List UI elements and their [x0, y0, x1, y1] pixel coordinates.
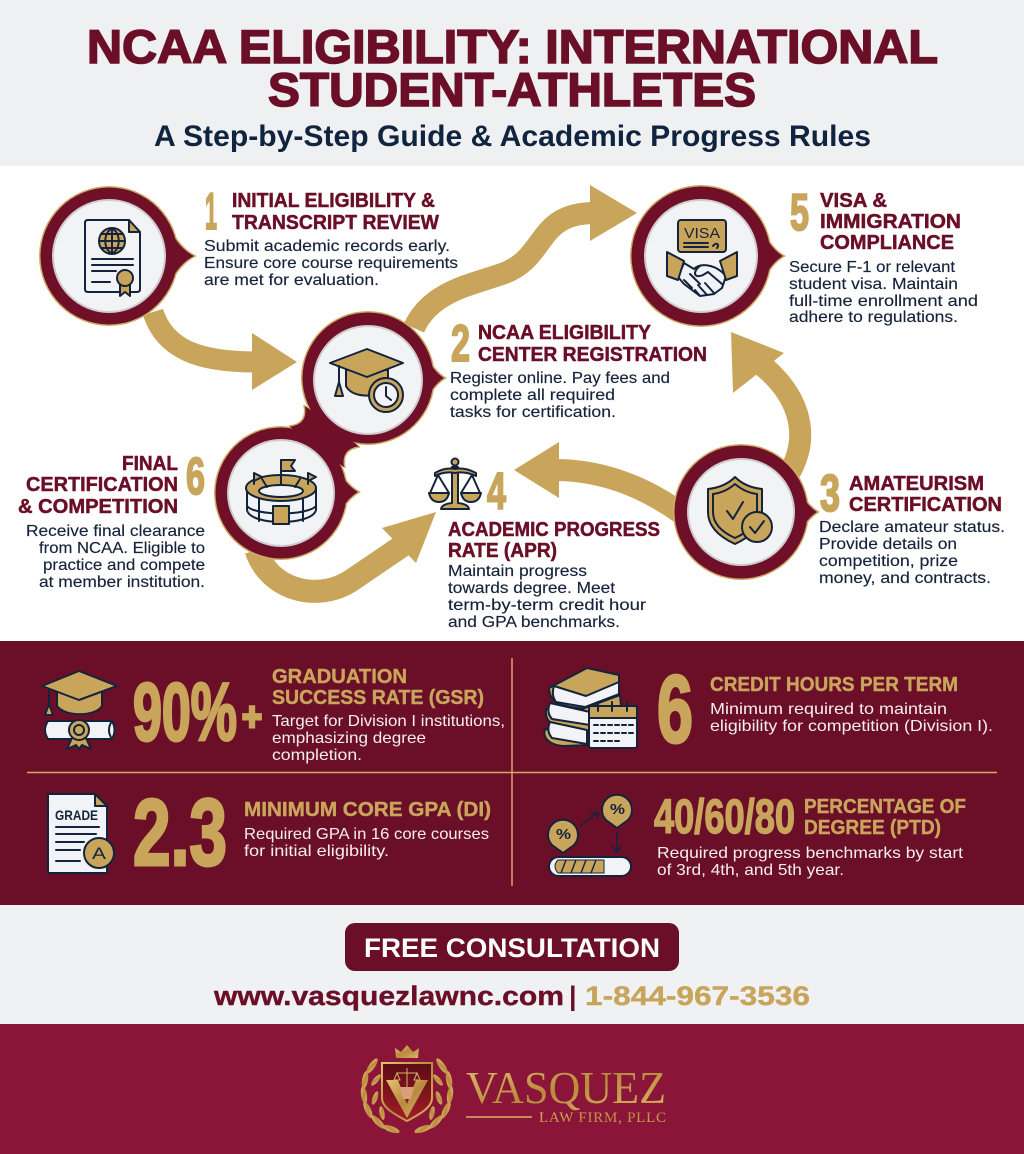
contact details: |	[569, 981, 577, 1011]
step 6 text	[18, 448, 205, 591]
badge: step 3	[673, 444, 820, 580]
step 3 body: Provide details on	[819, 536, 957, 553]
stat description: completion.	[272, 747, 362, 764]
step 4 heading	[448, 519, 660, 562]
icon: shield crest	[382, 1063, 432, 1121]
arrow: step 3 to step 4	[514, 442, 682, 514]
stat heading: SUCCESS RATE (GSR)	[272, 687, 484, 709]
stat: minimum core gpa	[48, 780, 491, 886]
step 1 heading	[232, 190, 439, 234]
stat value: 2.3	[133, 780, 227, 886]
icon: transcript document	[85, 220, 140, 296]
arrow: step 2 to step 5	[414, 185, 637, 328]
icon: stadium	[246, 460, 316, 524]
step 3 body: money, and contracts.	[819, 570, 991, 587]
stat heading	[272, 666, 484, 709]
icon: graduation cap with clock	[330, 349, 403, 412]
badge: step 1	[39, 186, 197, 326]
step 6 body	[26, 523, 205, 591]
stat: graduation success rate	[42, 666, 505, 764]
stat description	[710, 701, 993, 735]
stat heading: GRADUATION	[272, 666, 407, 688]
step 3 body: Declare amateur status.	[819, 519, 1005, 536]
stat description: Target for Division I institutions,	[272, 713, 505, 730]
step 3 body: competition, prize	[819, 553, 958, 570]
step 6 body: Receive final clearance	[26, 523, 205, 540]
step 6 heading: CERTIFICATION	[26, 474, 178, 496]
stat description: Required GPA in 16 core courses	[244, 826, 489, 843]
contact details: 1-844-967-3536	[585, 981, 810, 1011]
step 2 body: complete all required	[450, 387, 615, 404]
stat description	[657, 845, 964, 879]
badge: step 2	[301, 311, 447, 445]
stat heading: PERCENTAGE OF	[804, 796, 966, 818]
stat heading	[804, 796, 966, 839]
icon: cap and diploma	[42, 671, 117, 749]
button: free consultation: FREE CONSULTATION	[364, 933, 660, 963]
stat value: 40/60/80	[654, 791, 795, 844]
step 2 heading: CENTER REGISTRATION	[478, 344, 707, 366]
logo wordmark: LAW FIRM, PLLC	[539, 1110, 666, 1126]
step 3 heading: AMATEURISM	[849, 473, 984, 495]
step 6 body: from NCAA. Eligible to	[39, 540, 205, 557]
step 1 body: Submit academic records early.	[204, 238, 450, 255]
stat value: 6	[657, 656, 693, 763]
step 5 heading: COMPLIANCE	[820, 232, 954, 254]
step number 4: 4	[487, 463, 506, 521]
panel: key statistics	[0, 641, 1024, 905]
arrow: step 6 to step 4	[256, 512, 436, 591]
step 6 body: practice and compete	[43, 557, 205, 574]
step 6 heading	[18, 453, 178, 518]
title: NCAA ELIGIBILITY: INTERNATIONAL	[87, 20, 938, 73]
stat heading: CREDIT HOURS PER TERM	[710, 674, 958, 696]
step 4 body: towards degree. Meet	[448, 580, 616, 597]
title	[87, 20, 938, 116]
icon: laurel wreath	[360, 1057, 454, 1135]
step 3 heading: CERTIFICATION	[849, 494, 1002, 516]
step 5 body: Secure F-1 or relevant	[789, 259, 956, 276]
step 5 body: adhere to regulations.	[789, 309, 958, 326]
icon: crown	[395, 1045, 419, 1058]
step 2 heading: NCAA ELIGIBILITY	[478, 322, 652, 344]
icon: progress bar with percent pins	[548, 795, 632, 876]
step 2 heading	[478, 322, 707, 366]
step 6 body: at member institution.	[39, 574, 205, 591]
step 4 heading: RATE (APR)	[448, 540, 557, 562]
step 5 body	[789, 259, 978, 326]
step 5 heading: VISA &	[820, 190, 887, 212]
step 2 body	[450, 370, 670, 421]
icon: visa card and handshake	[667, 220, 737, 296]
stat description: Minimum required to maintain	[710, 701, 947, 718]
button: free consultation	[345, 923, 679, 971]
step 5 text	[789, 184, 978, 326]
stat description: emphasizing degree	[272, 730, 426, 747]
step 2 body: tasks for certification.	[450, 404, 616, 421]
icon: visa card and handshake: VISA	[684, 225, 720, 242]
stat: credit hours per term	[544, 656, 993, 763]
step 1 text: 1	[205, 183, 217, 241]
stat heading: MINIMUM CORE GPA (DI)	[244, 799, 491, 821]
logo wordmark: VASQUEZ	[466, 1062, 666, 1113]
step 6 heading: FINAL	[122, 453, 178, 475]
step number 5: 5	[790, 184, 809, 242]
badge: step 5	[630, 185, 786, 327]
panel: footer	[0, 1024, 1024, 1154]
step 4 body: term-by-term credit hour	[448, 597, 647, 614]
step 2 text	[450, 315, 707, 421]
panel: call to action	[0, 905, 1024, 1024]
icon: books and calendar	[544, 668, 637, 748]
step 3 heading	[849, 473, 1002, 516]
subtitle: A Step-by-Step Guide & Academic Progress Rules	[154, 120, 871, 153]
step 5 heading	[820, 190, 961, 254]
step 5 heading: IMMIGRATION	[820, 211, 961, 233]
icon: progress bar with percent pins: %	[610, 801, 625, 818]
icon: progress bar with percent pins: %	[556, 826, 571, 843]
stat: percentage of degree	[548, 791, 966, 879]
step 3 body	[819, 519, 1005, 587]
step 3 text	[819, 465, 1005, 587]
step number 3: 3	[820, 465, 840, 523]
title: STUDENT-ATHLETES	[268, 63, 756, 116]
header panel	[0, 0, 1024, 166]
stat description	[272, 713, 505, 764]
step 4 body: Maintain progress	[448, 563, 587, 580]
step number 6: 6	[186, 448, 205, 506]
step 4 text	[429, 458, 660, 631]
arrow: step 3 to step 5	[731, 332, 800, 472]
stat heading: DEGREE (PTD)	[804, 817, 941, 839]
stat description: Required progress benchmarks by start	[657, 845, 964, 862]
step 4 body	[448, 563, 647, 631]
logo: Vasquez Law Firm	[360, 1045, 666, 1135]
step 4 heading: ACADEMIC PROGRESS	[448, 519, 660, 541]
stat value: +	[242, 695, 262, 739]
step number 2: 2	[451, 315, 470, 373]
icon: grade document	[48, 794, 114, 873]
step 5 body: student visa. Maintain	[789, 276, 958, 293]
icon: shield with check	[708, 477, 772, 544]
icon: scales of justice	[429, 458, 481, 509]
connector: step 2 and step 6 badges	[289, 405, 360, 468]
stat description: eligibility for competition (Division I).	[710, 718, 993, 735]
step 1 body	[204, 238, 458, 289]
icon: grade document: A	[92, 844, 107, 863]
step 5 body: full-time enrollment and	[789, 293, 978, 310]
step 4 body: and GPA benchmarks.	[448, 614, 620, 631]
badge: step 6	[214, 426, 361, 560]
icon: grade document: GRADE	[55, 807, 98, 823]
step 1 heading: TRANSCRIPT REVIEW	[232, 212, 439, 234]
step 6 heading: & COMPETITION	[18, 496, 178, 518]
contact details: www.vasquezlawnc.com	[213, 981, 564, 1011]
step 1 text	[204, 183, 458, 289]
stat value: 90%	[133, 667, 237, 758]
step 2 body: Register online. Pay fees and	[450, 370, 670, 387]
step 1 heading: INITIAL ELIGIBILITY &	[232, 190, 435, 212]
arrow: step 1 to step 2	[153, 312, 297, 390]
stat description: for initial eligibility.	[244, 843, 389, 860]
step 1 body: Ensure core course requirements	[204, 255, 458, 272]
stat description: of 3rd, 4th, and 5th year.	[657, 862, 844, 879]
stat description	[244, 826, 489, 860]
step 1 body: are met for evaluation.	[204, 272, 379, 289]
contact details	[213, 981, 810, 1011]
